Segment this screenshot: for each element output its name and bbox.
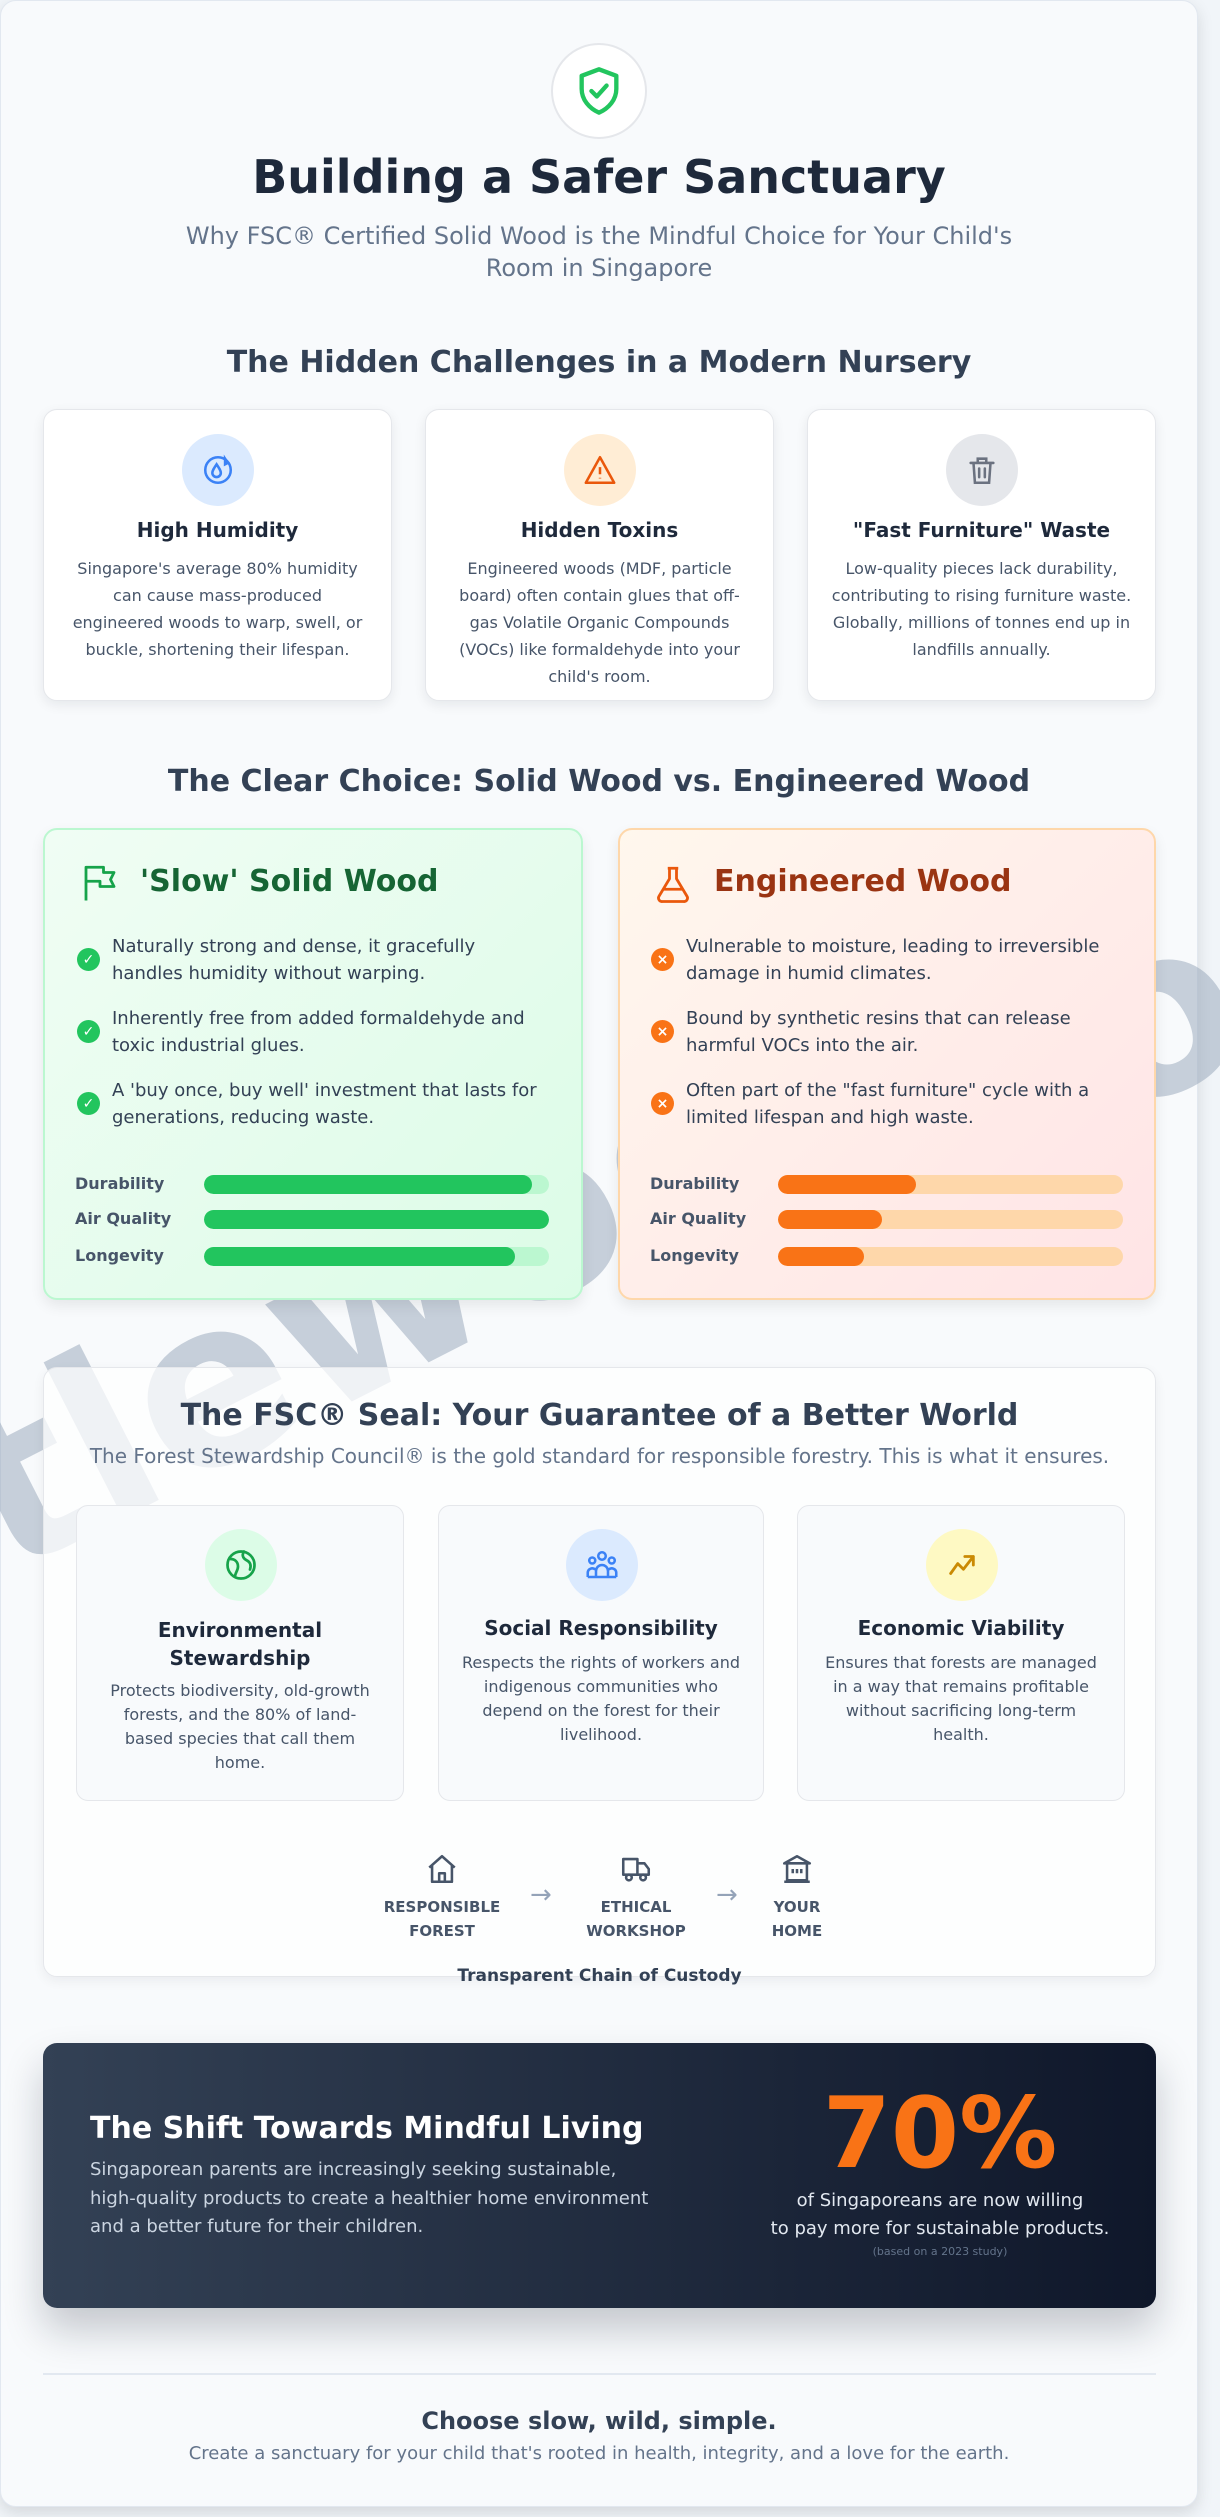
card text: contributing to rising furniture waste. [832, 586, 1131, 605]
icon: flask [657, 866, 689, 903]
sub-card text: without sacrificing long-term [846, 1701, 1076, 1720]
panel title: 'Slow' Solid Wood [140, 864, 438, 899]
label: forest [384, 1898, 500, 1940]
panel: engineered wood [618, 828, 1156, 1300]
sub-card text: forests, and the 80% of land- [124, 1705, 356, 1724]
panel: engineered wood: Often part of the "fast furniture" cycle with a [686, 1080, 1089, 1101]
icon: house [428, 1854, 456, 1883]
icon: trash [946, 434, 1018, 506]
caption: chain: Transparent Chain of Custody [457, 1966, 742, 1986]
sub-card text: depend on the forest for their [482, 1701, 720, 1720]
label: forest: FOREST [409, 1922, 475, 1940]
bar chart: solid wood [75, 1174, 549, 1266]
panel: solid wood: A 'buy once, buy well' investment that lasts for [112, 1080, 537, 1101]
card text: landfills annually. [912, 640, 1051, 659]
panel: FSC seal [43, 1367, 1156, 1977]
FSC subtitle: The Forest Stewardship Council® is the gold standard for responsible forestry. This is what it ensures. [90, 1444, 1109, 1468]
sub-card text: Protects biodiversity, old-growth [110, 1681, 370, 1700]
sub-card title: Social Responsibility [484, 1616, 718, 1640]
panel title: Engineered Wood [714, 864, 1011, 899]
banner text: and a better future for their children. [90, 2216, 423, 2237]
panel: hidden toxins [425, 409, 774, 701]
stat: 70%: of Singaporeans are now willing [797, 2190, 1083, 2211]
bar chart: engineered wood: Longevity [650, 1246, 739, 1265]
card text: Low-quality pieces lack durability, [845, 559, 1118, 578]
sub-card text: health. [933, 1725, 989, 1744]
panel: solid wood: generations, reducing waste. [112, 1107, 374, 1128]
cons list: Bound by synthetic resins that can release [686, 1008, 1071, 1029]
cons list: × [657, 952, 668, 968]
label: home: HOME [772, 1922, 822, 1940]
label: workshop: WORKSHOP [586, 1922, 686, 1940]
banner text: Singaporean parents are increasingly seeking sustainable, [90, 2159, 616, 2180]
icon: warning [564, 434, 636, 506]
label: workshop: ETHICAL [601, 1898, 671, 1916]
bar chart: solid wood: Longevity [75, 1246, 164, 1265]
icon: leaf globe [205, 1529, 277, 1601]
sub-card text [110, 1681, 370, 1772]
heading: comparison: The Clear Choice: Solid Wood vs. Engineered Wood [168, 764, 1030, 799]
arrow: → [530, 1880, 552, 1910]
label: workshop [586, 1898, 686, 1940]
panel: engineered wood: limited lifespan and high waste. [686, 1107, 974, 1128]
sub-card text: based species that call them [125, 1729, 355, 1748]
bar chart: solid wood: Durability [75, 1174, 164, 1193]
card text: child's room. [548, 667, 651, 686]
pros list [77, 936, 537, 1128]
sub-card text: indigenous communities who [484, 1677, 718, 1696]
sub-card: environmental [76, 1505, 404, 1801]
chain of custody [384, 1854, 822, 1940]
icon: water drop [182, 434, 254, 506]
card title: "Fast Furniture" Waste [853, 518, 1110, 542]
card text: Globally, millions of tonnes end up in [833, 613, 1130, 632]
stat: 70% [771, 2077, 1109, 2258]
panel: engineered wood: × [657, 1096, 668, 1112]
arrow: → [716, 1880, 738, 1910]
card text [832, 559, 1131, 659]
panel: solid wood: ✓ [83, 1096, 94, 1112]
card text: board) often contain glues that off- [459, 586, 740, 605]
sub-card text: home. [215, 1753, 265, 1772]
icon: trend up [926, 1529, 998, 1601]
pros list: ✓ [83, 952, 94, 968]
sub-card text [825, 1653, 1097, 1744]
card text: Singapore's average 80% humidity [77, 559, 358, 578]
sub-card text: livelihood. [560, 1725, 642, 1744]
banner: mindful living [43, 2043, 1156, 2308]
footer text: Create a sanctuary for your child that's rooted in health, integrity, and a love for the earth. [189, 2443, 1009, 2464]
card text [73, 559, 362, 659]
pros list: ✓ [83, 1024, 94, 1040]
card text [459, 559, 740, 686]
sub-card text: Ensures that forests are managed [825, 1653, 1097, 1672]
label: home: YOUR [774, 1898, 820, 1916]
sub-card title: Stewardship [170, 1646, 310, 1670]
bar chart: engineered wood: Durability [650, 1174, 739, 1193]
icon: people [566, 1529, 638, 1601]
bar chart: engineered wood: Air Quality [650, 1209, 746, 1228]
subtitle: Why FSC® Certified Solid Wood is the Mindful Choice for Your Child's [186, 222, 1012, 250]
sub-card: social [438, 1505, 764, 1801]
stat: 70%: 70% [823, 2077, 1057, 2191]
card title: High Humidity [137, 518, 298, 542]
pros list: Naturally strong and dense, it gracefully [112, 936, 475, 957]
card text: Engineered woods (MDF, particle [467, 559, 732, 578]
header icon: shield [551, 43, 647, 139]
sub-card text: in a way that remains profitable [833, 1677, 1089, 1696]
icon: truck [622, 1858, 650, 1882]
stat: 70%: (based on a 2023 study) [873, 2245, 1007, 2258]
pros list: handles humidity without warping. [112, 963, 425, 984]
icon: flag [84, 866, 116, 900]
subtitle: Room in Singapore [486, 254, 712, 282]
banner heading: The Shift Towards Mindful Living [90, 2111, 644, 2146]
bar chart: engineered wood [650, 1174, 1123, 1266]
cons list: × [657, 1024, 668, 1040]
card text: gas Volatile Organic Compounds [470, 613, 729, 632]
bar chart: solid wood: Air Quality [75, 1209, 171, 1228]
card text: buckle, shortening their lifespan. [85, 640, 350, 659]
subtitle [186, 222, 1012, 282]
pros list: toxic industrial glues. [112, 1035, 305, 1056]
sub-card text: Respects the rights of workers and [462, 1653, 740, 1672]
sub-card title: Economic Viability [858, 1616, 1064, 1640]
cons list [651, 936, 1099, 1128]
card text: engineered woods to warp, swell, or [73, 613, 362, 632]
sub-card text [462, 1653, 740, 1744]
sub-card: economic [797, 1505, 1125, 1801]
icon: home building [783, 1855, 812, 1883]
cons list: Vulnerable to moisture, leading to irreversible [686, 936, 1099, 957]
card title: Hidden Toxins [521, 518, 678, 542]
sub-card title: Environmental [158, 1618, 322, 1642]
card text: (VOCs) like formaldehyde into your [459, 640, 740, 659]
panel: fast furniture waste [807, 409, 1156, 701]
pros list: Inherently free from added formaldehyde and [112, 1008, 525, 1029]
sub-card title [158, 1618, 322, 1670]
footer heading: Choose slow, wild, simple. [421, 2407, 777, 2435]
heading: challenges: The Hidden Challenges in a Modern Nursery [227, 345, 971, 380]
stat: 70%: to pay more for sustainable products. [771, 2218, 1109, 2239]
panel: solid wood [43, 828, 583, 1300]
panel: high humidity [43, 409, 392, 701]
cons list: harmful VOCs into the air. [686, 1035, 918, 1056]
FSC heading: The FSC® Seal: Your Guarantee of a Better World [181, 1398, 1018, 1433]
label: forest: RESPONSIBLE [384, 1898, 500, 1916]
label: home [772, 1898, 822, 1940]
divider [43, 2373, 1156, 2375]
cons list: damage in humid climates. [686, 963, 932, 984]
title: Building a Safer Sanctuary [252, 150, 946, 204]
banner text [90, 2159, 648, 2237]
card text: can cause mass-produced [113, 586, 322, 605]
banner text: high-quality products to create a healthier home environment [90, 2188, 648, 2208]
